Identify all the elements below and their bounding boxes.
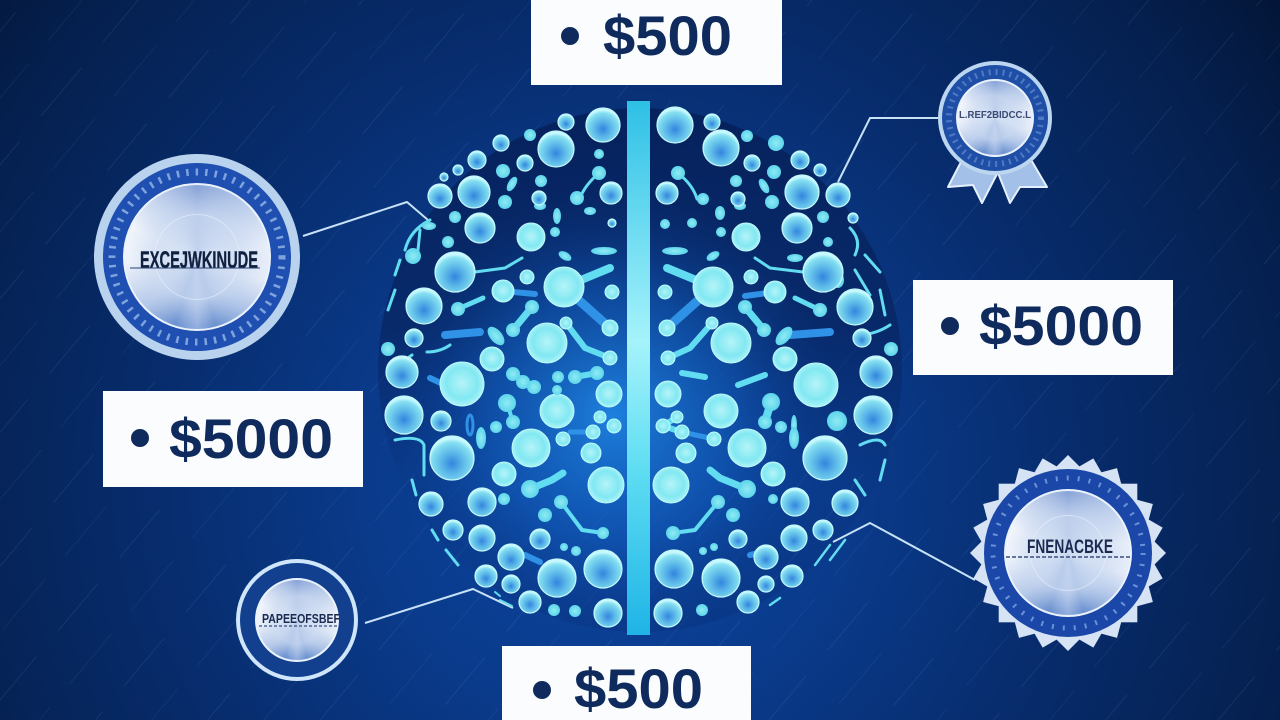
bubbles: right hemisphere [653, 107, 898, 627]
ribbon tails [948, 158, 1047, 203]
links: left hemisphere [388, 149, 617, 606]
medal: starburst badge bottom right [970, 455, 1166, 651]
medal: ribbon badge top right [938, 61, 1052, 204]
label: left $5000: $5000 [169, 407, 333, 470]
sphere: left hemisphere [381, 108, 624, 627]
label: right $5000: $5000 [979, 294, 1143, 357]
label: right $5000 [913, 280, 1173, 375]
medal: starburst badge bottom right: FNENACBKE [1027, 537, 1113, 558]
links: right hemisphere [662, 173, 890, 605]
medal: small badge bottom left: PAPEEOFSBEF [262, 611, 340, 626]
connector lines [303, 118, 975, 623]
medal: small badge bottom left [236, 559, 358, 681]
central divider bar [627, 101, 650, 635]
label: top $500: $500 [603, 4, 732, 67]
label: bottom $500: $500 [574, 657, 703, 720]
label: bottom $500 [502, 646, 751, 720]
medal: ribbon badge top right: L.REF2BIDCC.L [959, 110, 1031, 121]
label: left $5000 [103, 391, 363, 487]
medal: large left badge [94, 154, 300, 360]
bubbles: left hemisphere [381, 108, 624, 627]
medal: large left badge: EXCEJWKINUDE [140, 247, 258, 274]
sphere: right hemisphere [653, 107, 898, 627]
label: top $500 [531, 0, 782, 85]
